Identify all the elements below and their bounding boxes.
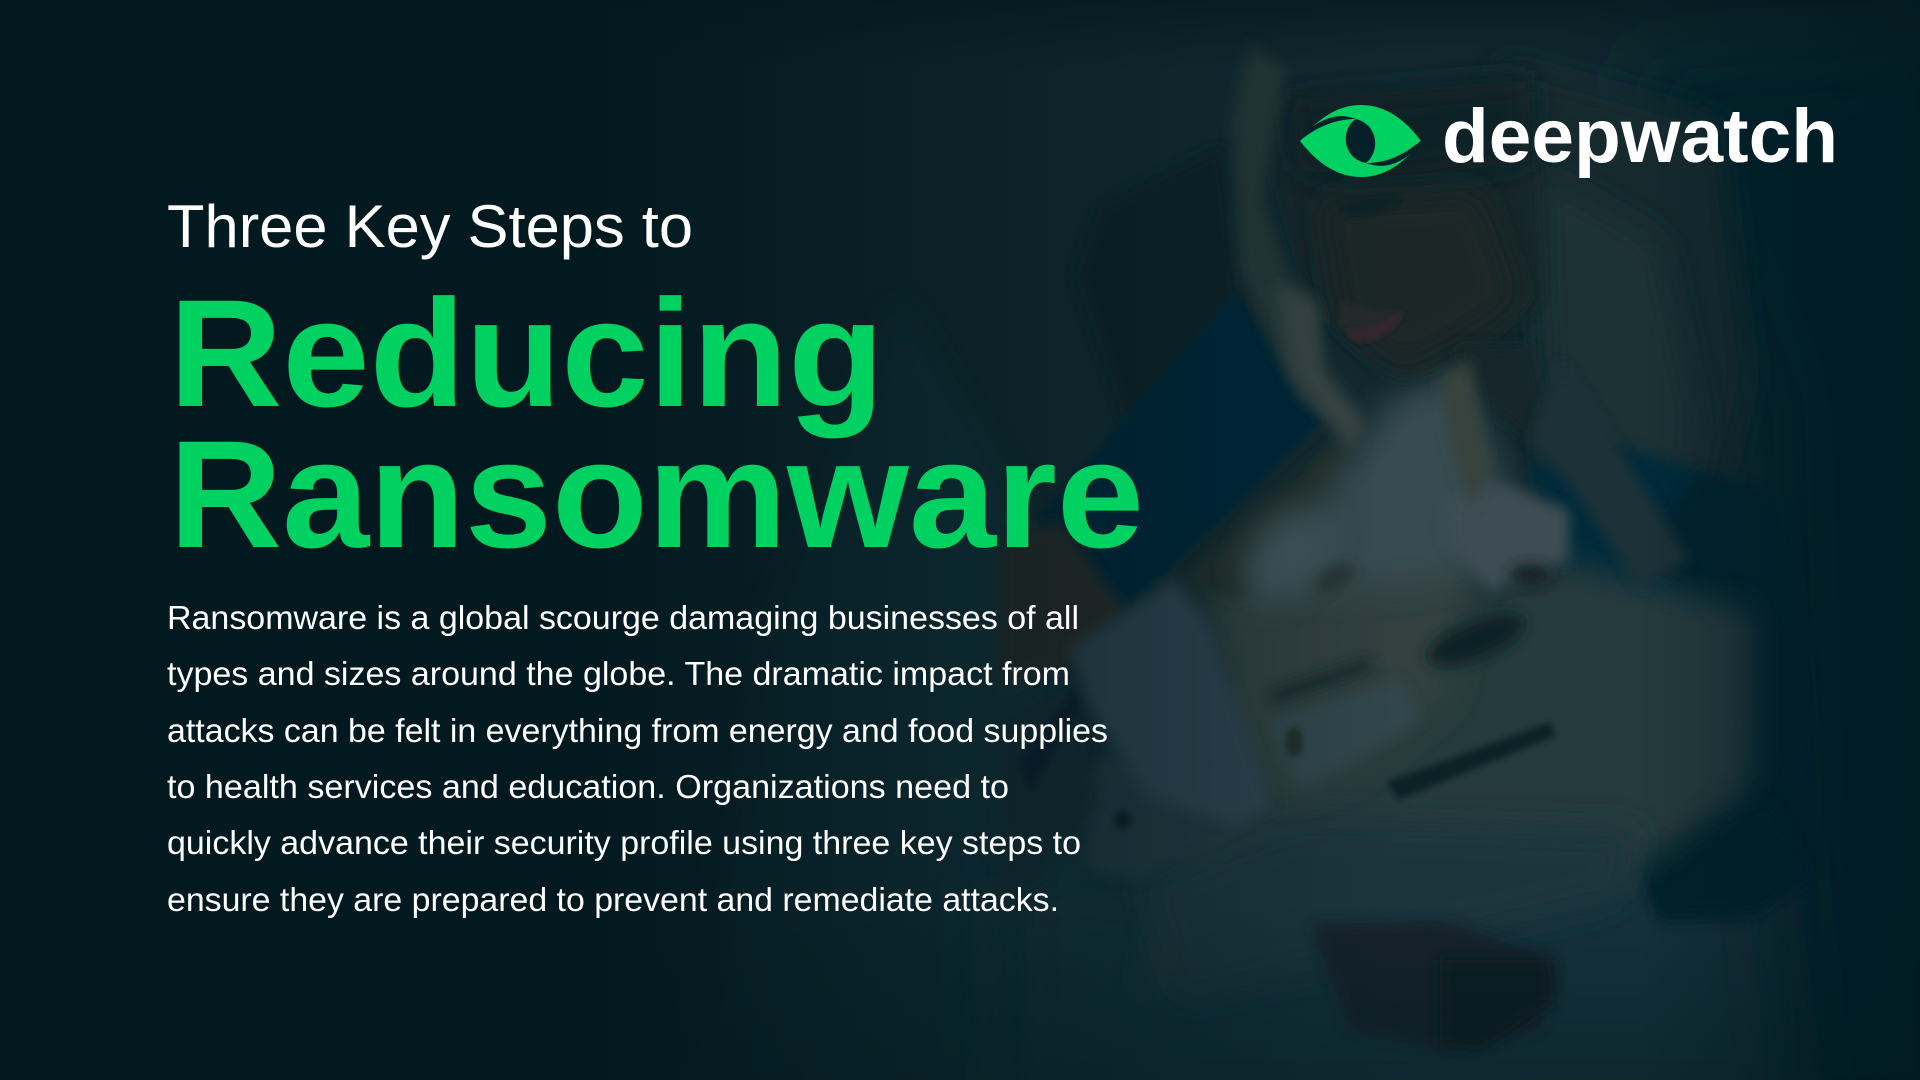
chest and blouse [1250,370,1540,590]
intro paragraph: Ransomware is a global scourge damaging businesses of all [167,599,1079,636]
intro paragraph: types and sizes around the globe. The dramatic impact from [167,655,1070,692]
face details [1340,300,1404,342]
intro paragraph: quickly advance their security profile using three key steps to [167,824,1081,861]
wordmark: deepwatch [1442,94,1838,179]
sleeve: left arm (dark blue) [1035,293,1323,613]
intro paragraph: attacks can be felt in everything from energy and food supplies [167,712,1108,749]
dark marks on laptop/hand [1421,603,1531,677]
subtitle: Three Key Steps to [167,193,693,260]
face and hair [1262,70,1540,375]
hand [1200,500,1480,800]
intro paragraph [167,599,1108,918]
main title: Reducing [169,268,884,439]
main title: Ransomware [169,409,1144,580]
main title [169,268,1144,580]
surface beneath the hand [1141,560,1752,990]
logo: deepwatch [1297,94,1838,179]
icon: green eye [1297,105,1424,177]
intro paragraph: to health services and education. Organizations need to [167,768,1009,805]
white cuff [1070,578,1273,826]
lower dark hand [1311,920,1557,1050]
intro paragraph: ensure they are prepared to prevent and remediate attacks. [167,881,1059,918]
